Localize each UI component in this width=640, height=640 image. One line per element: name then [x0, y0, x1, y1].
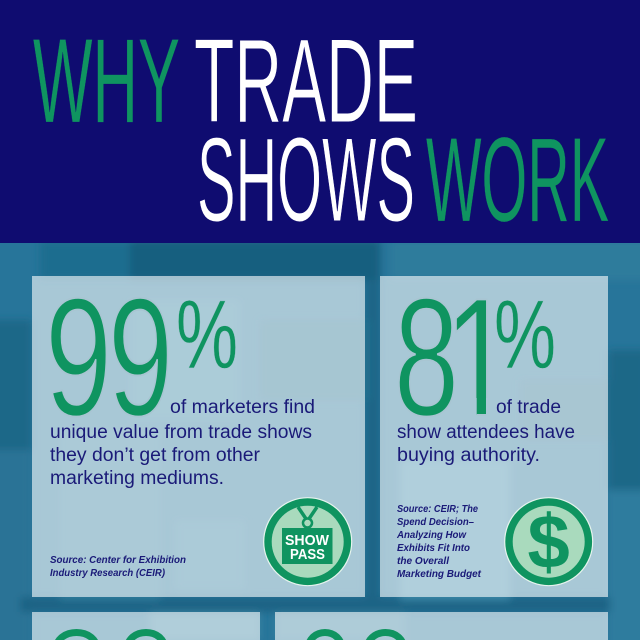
background photo of trade show floor: [0, 240, 640, 640]
statistic: 99 percent: 9: [45, 263, 112, 451]
source note: Marketing Budget: [397, 568, 481, 580]
panel background: [275, 612, 608, 640]
icon: show pass badge: PASS: [290, 546, 325, 563]
body text: they don’t get from other: [50, 445, 261, 466]
body text: show attendees have: [397, 422, 575, 443]
title: SHOWS: [197, 113, 415, 247]
icon: show pass badge: SHOW: [285, 532, 330, 549]
panel background: [32, 612, 260, 640]
panel: lower right, cropped: [275, 612, 608, 640]
statistic: 99 percent: %: [176, 280, 238, 389]
cropped digit tops: [308, 633, 404, 640]
panel: lower left, cropped: [32, 612, 260, 640]
body text: marketing mediums.: [50, 468, 224, 489]
icon: show pass badge: [264, 498, 352, 586]
statistic: 81 percent: %: [494, 280, 556, 389]
source note: Exhibits Fit Into: [397, 542, 471, 554]
body text: of marketers find: [170, 397, 315, 418]
source note: [396, 503, 481, 580]
statistic: 81 percent: [400, 298, 554, 416]
icon: dollar coin: $: [528, 500, 570, 585]
source note: Spend Decision–: [397, 516, 474, 528]
panel: 81% of attendees: [380, 263, 608, 597]
source note: Source: CEIR; The: [397, 503, 478, 515]
source note: Industry Research (CEIR): [50, 567, 165, 579]
source note: the Overall: [397, 555, 450, 567]
cropped digit tops: [56, 633, 165, 640]
header band: [0, 0, 640, 243]
statistic: 99 percent: [45, 263, 238, 451]
source note: Analyzing How: [396, 529, 467, 541]
title: WHY: [33, 14, 180, 148]
icon: dollar coin: [505, 498, 593, 586]
statistic: 99 percent: 9: [108, 263, 173, 451]
body text: [50, 397, 315, 489]
source note: [50, 554, 186, 579]
panel background: [32, 276, 365, 597]
statistic: 81 percent: 8: [394, 263, 459, 451]
statistic: 81 percent: 1: [444, 263, 514, 451]
panel: 99% of marketers: [32, 263, 365, 597]
title: TRADE: [194, 14, 418, 148]
body text: of trade: [496, 397, 561, 418]
body text: buying authority.: [397, 445, 540, 466]
title: [33, 14, 609, 247]
body text: unique value from trade shows: [50, 422, 312, 443]
panel background: [380, 276, 608, 597]
body text: [397, 397, 575, 466]
source note: Source: Center for Exhibition: [50, 554, 186, 566]
